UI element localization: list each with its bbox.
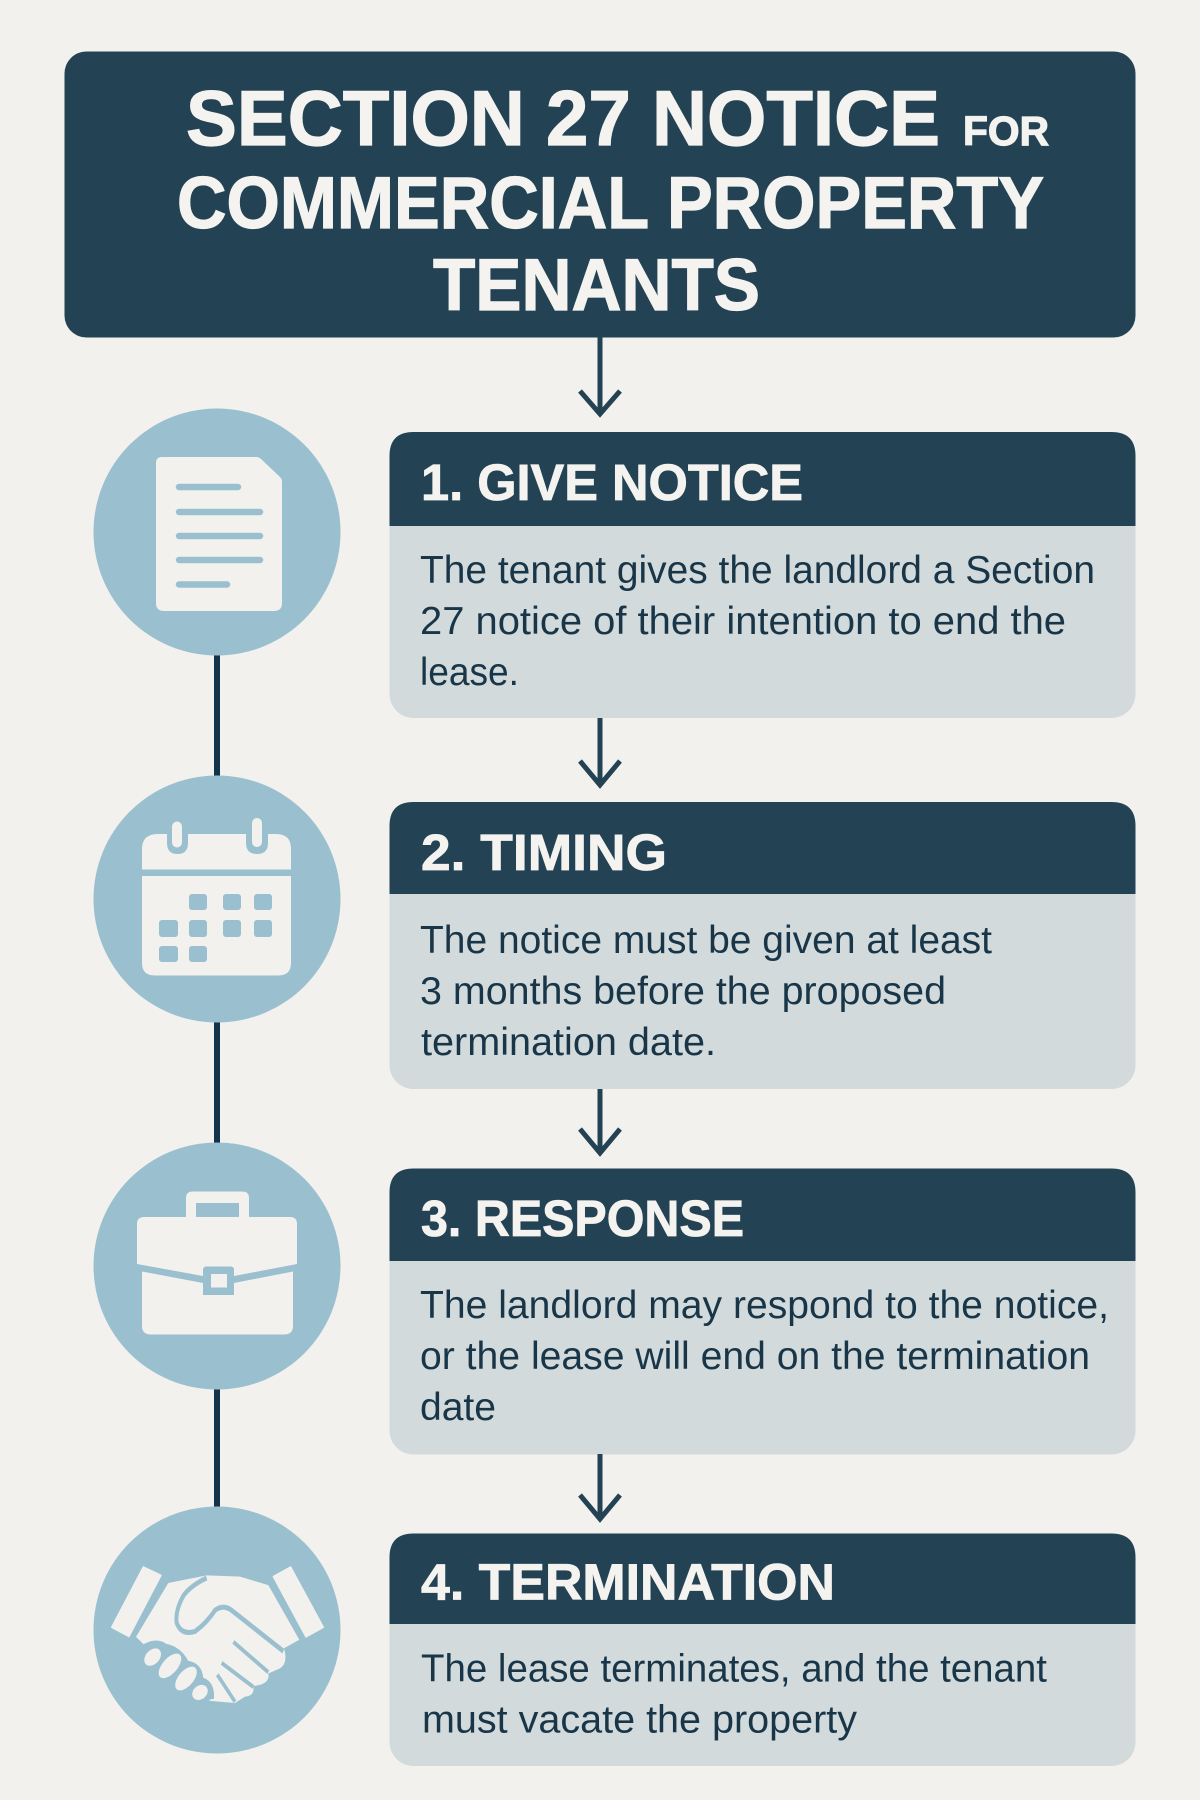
panel: step 1 give notice: 1. GIVE NOTICE (421, 454, 803, 511)
arrow: step 1 to step 2 (580, 718, 620, 785)
panel: step 2 timing (390, 802, 1136, 1089)
title banner (64, 52, 1136, 338)
panel: step 2 timing: termination date. (421, 1021, 716, 1064)
title banner: TENANTS (433, 245, 760, 326)
panel: step 4 termination: must vacate the property (422, 1698, 857, 1742)
panel: step 1 give notice: 27 notice of their intention to end the (420, 600, 1066, 643)
connector: icon 2 to icon 3 (214, 1020, 220, 1144)
panel: step 2 timing: The notice must be given at least (420, 919, 992, 962)
connector: icon 3 to icon 4 (214, 1387, 220, 1508)
arrow: title to step 1 (580, 337, 620, 414)
panel: step 3 response: The landlord may respond to the notice, (420, 1284, 1109, 1327)
panel: step 3 response (390, 1168, 1136, 1454)
panel: step 1 give notice: The tenant gives the landlord a Section (420, 549, 1095, 592)
panel: step 1 give notice: lease. (420, 651, 519, 694)
icon: handshake (94, 1506, 340, 1754)
panel: step 4 termination: The lease terminates, and the tenant (421, 1648, 1047, 1690)
panel: step 4 termination (390, 1534, 1136, 1766)
panel: step 2 timing: 2. TIMING (421, 824, 667, 881)
icon: document (94, 408, 340, 656)
panel: step 3 response: or the lease will end on the termination (420, 1335, 1090, 1378)
panel: step 3 response: 3. RESPONSE (421, 1190, 744, 1247)
icon: calendar (94, 776, 340, 1022)
title banner: SECTION 27 NOTICE (186, 74, 940, 162)
title banner: COMMERCIAL PROPERTY (177, 163, 1044, 244)
arrow: step 2 to step 3 (580, 1089, 620, 1153)
panel: step 2 timing: 3 months before the proposed (420, 970, 946, 1013)
panel: step 1 give notice (390, 432, 1136, 718)
panel: step 4 termination: 4. TERMINATION (421, 1554, 835, 1610)
panel: step 3 response: date (420, 1386, 496, 1429)
title banner: FOR (963, 108, 1049, 154)
icon: briefcase (94, 1142, 340, 1390)
arrow: step 3 to step 4 (580, 1454, 620, 1519)
connector: icon 1 to icon 2 (214, 654, 220, 777)
